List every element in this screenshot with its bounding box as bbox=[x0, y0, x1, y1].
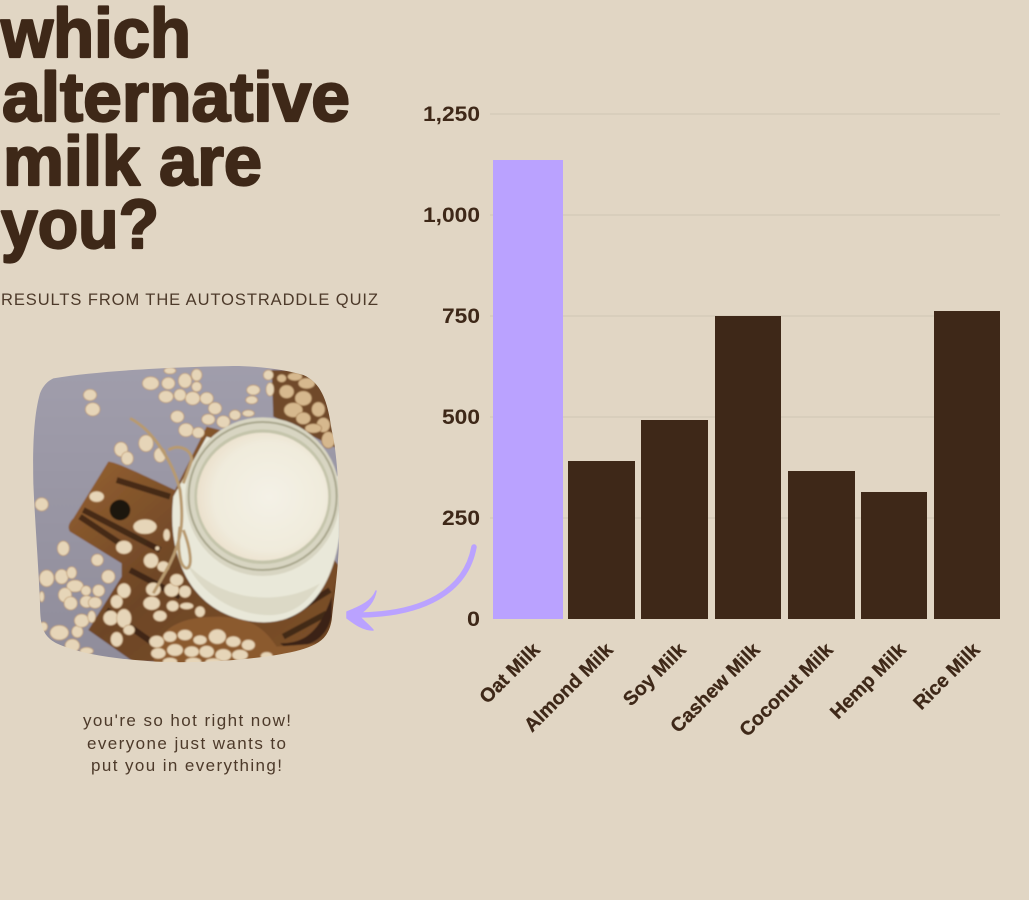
y axis labels: 750 bbox=[442, 305, 480, 328]
title: milk are bbox=[3, 122, 262, 200]
bar: almond milk bbox=[568, 461, 635, 619]
bar: soy milk bbox=[641, 420, 708, 619]
x axis labels: Coconut Milk bbox=[735, 639, 838, 741]
caption text: put you in everything! bbox=[91, 756, 282, 775]
y axis labels: 250 bbox=[442, 507, 480, 530]
x axis labels: Oat Milk bbox=[475, 639, 545, 708]
y axis labels: 1,000 bbox=[423, 204, 480, 227]
caption text: everyone just wants to bbox=[87, 734, 286, 753]
bar chart bbox=[423, 103, 1000, 741]
caption text bbox=[83, 711, 291, 775]
bar: cashew milk bbox=[715, 316, 781, 619]
arrow: purple curved pointer bbox=[347, 547, 474, 630]
y axis labels: 1,250 bbox=[423, 103, 480, 126]
title bbox=[0, 0, 350, 263]
x axis labels: Almond Milk bbox=[520, 639, 618, 737]
x axis labels: Soy Milk bbox=[619, 639, 691, 710]
y axis labels: 0 bbox=[467, 608, 480, 631]
x axis labels: Cashew Milk bbox=[666, 639, 765, 737]
x axis labels: Hemp Milk bbox=[826, 639, 911, 724]
bar: coconut milk bbox=[788, 471, 855, 619]
x axis labels bbox=[475, 639, 985, 741]
bar: hemp milk bbox=[861, 492, 927, 619]
y axis labels: 500 bbox=[442, 406, 480, 429]
bar: oat milk bbox=[493, 160, 563, 619]
title: alternative bbox=[2, 58, 350, 136]
title: you? bbox=[1, 185, 159, 263]
subtitle: RESULTS FROM THE AUTOSTRADDLE QUIZ bbox=[1, 291, 378, 309]
caption text: you're so hot right now! bbox=[83, 711, 291, 730]
photo: oat milk jar bbox=[33, 366, 339, 662]
x axis labels: Rice Milk bbox=[909, 639, 985, 714]
y axis labels bbox=[423, 103, 480, 631]
bar: rice milk bbox=[934, 311, 1000, 619]
